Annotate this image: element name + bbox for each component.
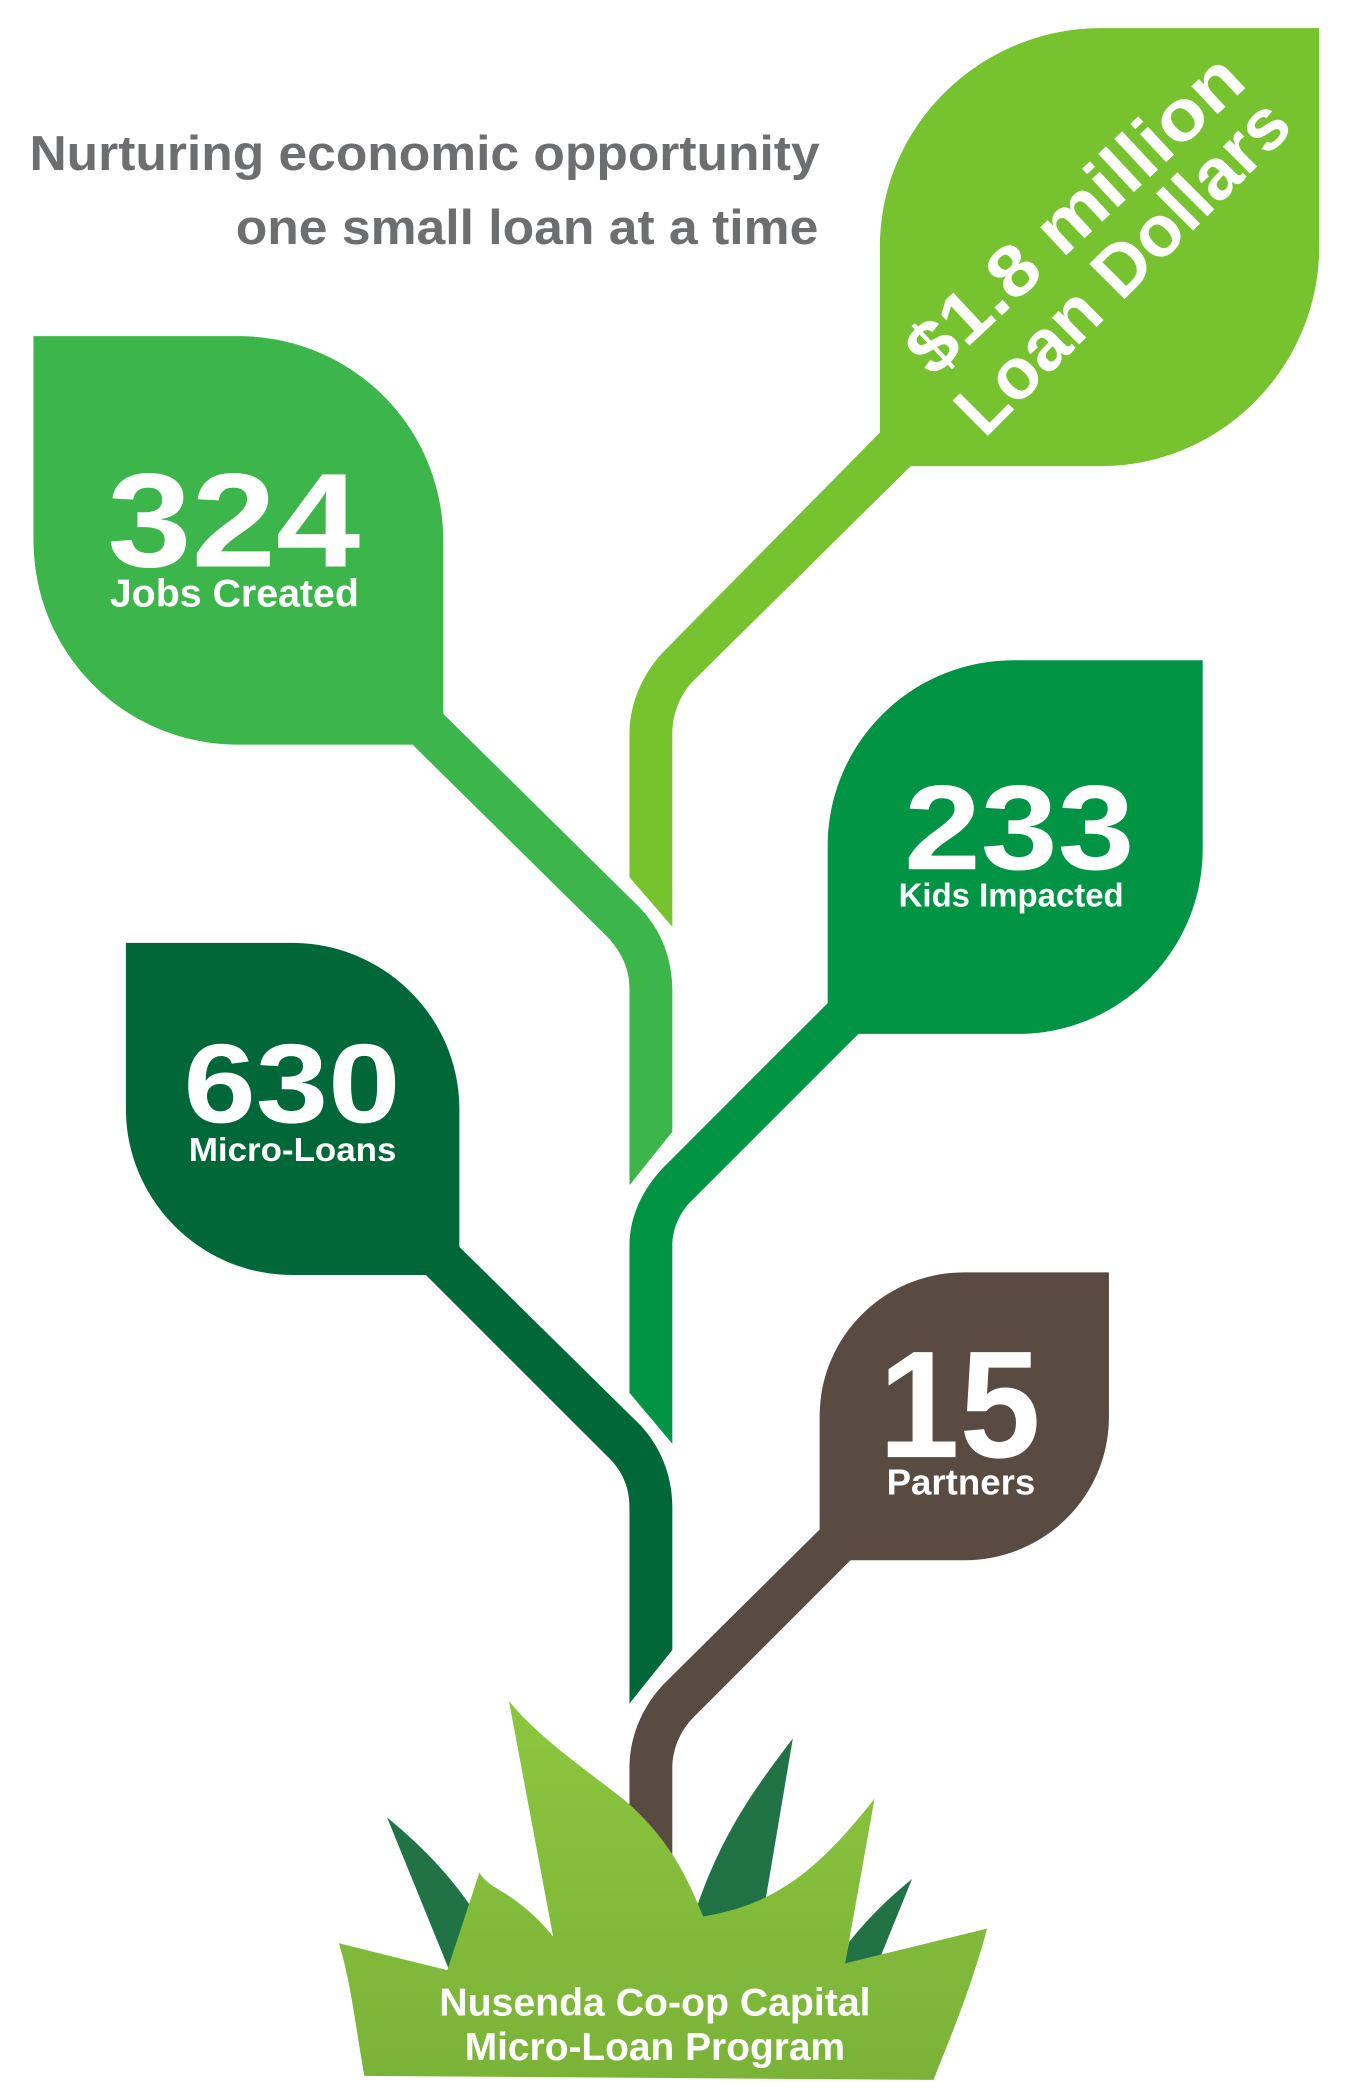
leaf: jobs created: Jobs Created: [110, 573, 359, 616]
program label: [439, 1982, 871, 2069]
leaf: jobs created: [33, 336, 672, 1185]
title: [29, 125, 820, 255]
leaf: partners: Partners: [887, 1462, 1035, 1503]
leaf: micro-loans: 630: [183, 1020, 400, 1146]
program label: Nusenda Co-op Capital: [439, 1982, 871, 2025]
leaf: loan dollars: $1.8 million: [890, 38, 1260, 391]
leaf: micro-loans: Micro-Loans: [189, 1132, 396, 1169]
leaf: kids impacted: Kids Impacted: [899, 878, 1124, 915]
leaf: partners: [629, 1272, 1109, 1902]
leaf: kids impacted: 233: [904, 760, 1134, 895]
leaf: loan dollars: [629, 28, 1319, 927]
program label: Micro-Loan Program: [465, 2026, 845, 2069]
leaf: loan dollars: Loan Dollars: [939, 83, 1306, 451]
leaf: jobs created: 324: [107, 447, 360, 596]
dark grass blades: [387, 1738, 912, 1969]
leaf: micro-loans: [126, 943, 672, 1704]
title: one small loan at a time: [236, 199, 818, 255]
grass: [339, 1701, 987, 2080]
leaf: partners: 15: [879, 1320, 1041, 1490]
leaf: kids impacted: [629, 660, 1203, 1444]
title: Nurturing economic opportunity: [29, 125, 820, 181]
